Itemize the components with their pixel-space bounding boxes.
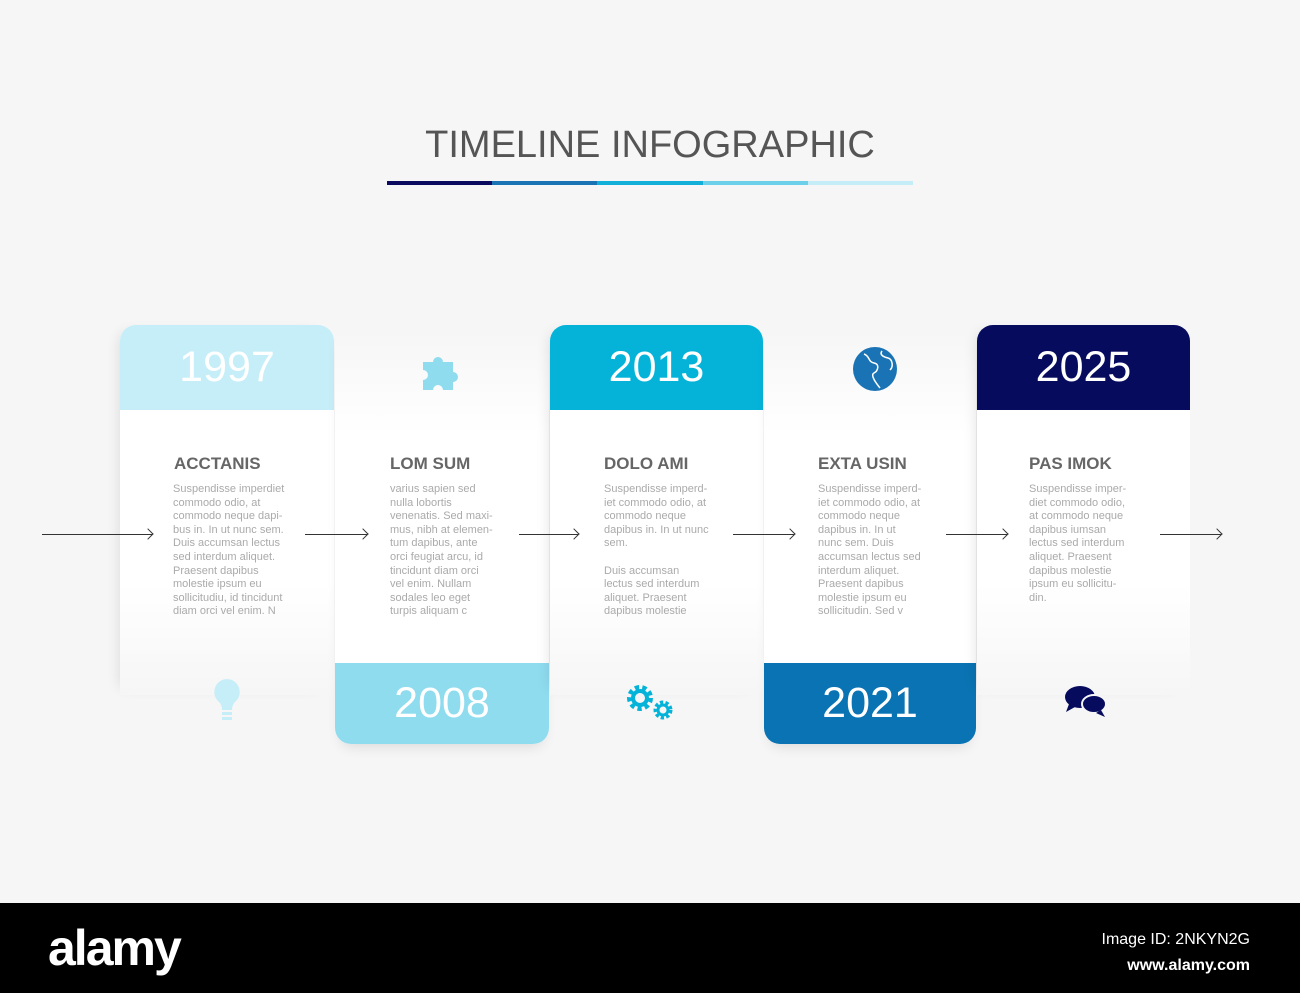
text: sollicitudiu, id tincidunt	[173, 592, 282, 604]
card 2021	[764, 423, 976, 750]
icon: chat	[1065, 686, 1105, 717]
card 2025	[973, 325, 1190, 686]
text: Suspendisse imper-	[1029, 483, 1126, 495]
text: nunc sem. Duis	[818, 537, 894, 549]
text: diet commodo odio,	[1029, 497, 1125, 509]
icon: globe	[853, 347, 897, 391]
text: Duis accumsan	[604, 565, 679, 577]
text: commodo neque	[818, 510, 900, 522]
text: lectus sed interdum	[604, 578, 699, 590]
text: turpis aliquam c	[390, 605, 467, 617]
text: interdum aliquet.	[818, 565, 899, 577]
text: nulla lobortis	[390, 497, 452, 509]
logo: alamy	[48, 920, 180, 976]
text 3: DOLO AMI	[604, 454, 688, 473]
card 1997	[116, 325, 334, 686]
text: dapibus molestie	[1029, 565, 1112, 577]
text: Suspendisse imperd-	[604, 483, 707, 495]
text: molestie ipsum eu	[173, 578, 262, 590]
text: din.	[1029, 592, 1047, 604]
text: dapibus in. In ut nunc	[604, 524, 709, 536]
text: sem.	[604, 537, 628, 549]
image id: Image ID: 2NKYN2G	[1102, 931, 1250, 948]
text: Praesent dapibus	[173, 565, 259, 577]
text: bus in. In ut nunc sem.	[173, 524, 284, 536]
card 2008	[335, 423, 549, 750]
text: Suspendisse imperdiet	[173, 483, 284, 495]
text: Praesent dapibus	[818, 578, 904, 590]
text: varius sapien sed	[390, 483, 476, 495]
text: iet commodo odio, at	[818, 497, 920, 509]
text: dapibus in. In ut	[818, 524, 896, 536]
image id	[1102, 931, 1250, 974]
card 1997: 1997	[179, 343, 275, 391]
text 5: PAS IMOK	[1029, 454, 1112, 473]
title underline	[387, 181, 913, 185]
text: sollicitudin. Sed v	[818, 605, 903, 617]
text: orci feugiat arcu, id	[390, 551, 483, 563]
text: dapibus molestie	[604, 605, 687, 617]
text: vel enim. Nullam	[390, 578, 471, 590]
text: aliquet. Praesent	[604, 592, 687, 604]
text: venenatis. Sed maxi-	[390, 510, 493, 522]
text: Duis accumsan lectus	[173, 537, 280, 549]
text: mus, nibh at elemen-	[390, 524, 493, 536]
text: sodales leo eget	[390, 592, 470, 604]
text: iet commodo odio, at	[604, 497, 706, 509]
text: lectus sed interdum	[1029, 537, 1124, 549]
text: commodo neque	[604, 510, 686, 522]
icon: bulb	[214, 679, 240, 720]
text: commodo odio, at	[173, 497, 260, 509]
text: sed interdum aliquet.	[173, 551, 275, 563]
icon: puzzle	[423, 357, 458, 390]
icon: gears	[627, 685, 672, 720]
image id: www.alamy.com	[1127, 957, 1250, 974]
card 2025: 2025	[1036, 343, 1131, 391]
card 2008: 2008	[394, 679, 490, 727]
card 2021: 2021	[822, 679, 918, 727]
text: diam orci vel enim. N	[173, 605, 276, 617]
text 1: ACCTANIS	[174, 454, 261, 473]
text: accumsan lectus sed	[818, 551, 921, 563]
text: Suspendisse imperd-	[818, 483, 921, 495]
text: dapibus iumsan	[1029, 524, 1106, 536]
text: tum dapibus, ante	[390, 537, 477, 549]
text: commodo neque dapi-	[173, 510, 282, 522]
title: TIMELINE INFOGRAPHIC	[425, 124, 875, 166]
footer bar	[0, 903, 1300, 993]
text: aliquet. Praesent	[1029, 551, 1112, 563]
text 4: EXTA USIN	[818, 454, 907, 473]
text: ipsum eu sollicitu-	[1029, 578, 1116, 590]
card 2013: 2013	[609, 343, 704, 391]
text: tincidunt diam orci	[390, 565, 479, 577]
arrows	[42, 534, 152, 535]
text: molestie ipsum eu	[818, 592, 907, 604]
text: at commodo neque	[1029, 510, 1123, 522]
card 2013	[546, 325, 763, 686]
text 2: LOM SUM	[390, 454, 470, 473]
